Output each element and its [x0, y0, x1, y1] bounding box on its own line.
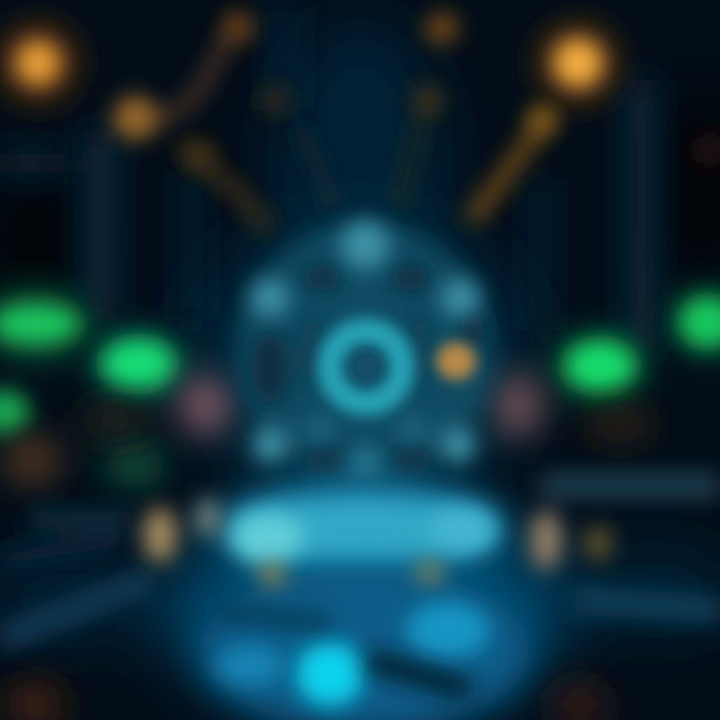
wheel nodes	[251, 221, 479, 477]
green lights	[0, 290, 720, 487]
bottom ember glows	[5, 683, 608, 720]
orange lights	[0, 12, 720, 169]
dark wheel gaps	[252, 265, 484, 472]
orange traces	[135, 20, 545, 225]
circuit wheel	[237, 221, 493, 480]
brown side glows	[2, 373, 654, 484]
vertical pillars	[0, 0, 656, 350]
lower cyan water	[200, 570, 530, 720]
horizontal bands	[0, 472, 720, 640]
orange wheel node	[436, 342, 476, 380]
wheel disc	[237, 224, 493, 480]
wheel hub centre	[351, 352, 381, 382]
cream lights along platform	[143, 498, 612, 584]
wheel hub ring	[330, 331, 402, 403]
bright cyan platform	[217, 482, 507, 574]
